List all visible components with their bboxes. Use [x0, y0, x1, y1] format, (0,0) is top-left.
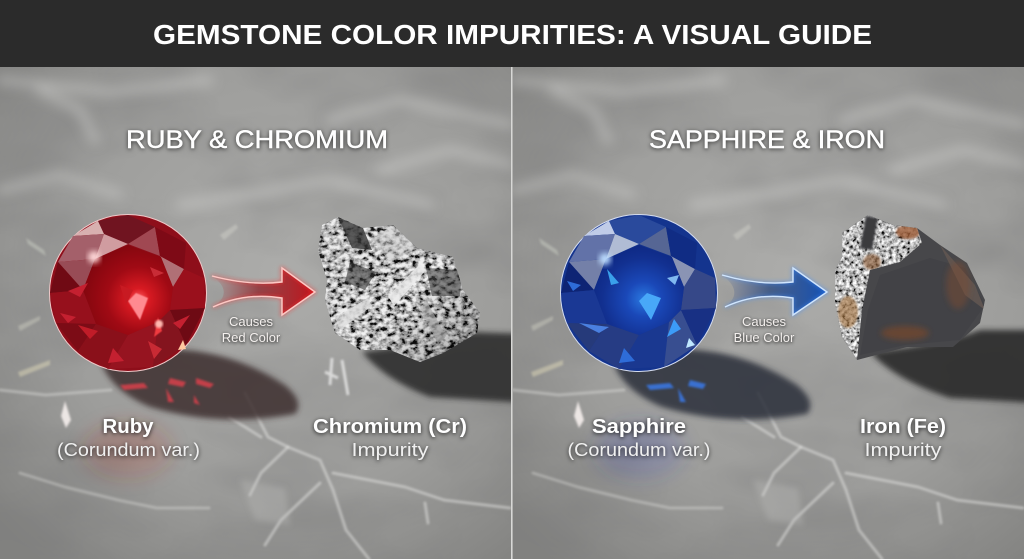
arrow label: causes red color [222, 314, 281, 345]
title: GEMSTONE COLOR IMPURITIES: A VISUAL GUIDE [153, 19, 872, 50]
arrow label: causes red color: Causes [229, 314, 274, 329]
arrow label: causes blue color [734, 314, 795, 345]
arrow: sapphire to iron [722, 268, 827, 315]
label: iron: Iron (Fe) [860, 416, 946, 438]
icon: ruby gem [50, 214, 206, 372]
label: iron: Impurity [864, 440, 942, 460]
panel: ruby and chromium [0, 67, 560, 559]
marble background right [513, 67, 1024, 559]
label: ruby: (Corundum var.) [57, 440, 200, 460]
label: iron [860, 416, 946, 460]
label: chromium: Impurity [352, 440, 428, 460]
label: chromium: Chromium (Cr) [313, 416, 467, 438]
rock shadow: iron [870, 330, 1024, 405]
arrow: ruby to chromium [212, 268, 315, 315]
heading: sapphire and iron: SAPPHIRE & IRON [649, 126, 885, 154]
label: sapphire: Sapphire [592, 416, 686, 438]
label: sapphire [568, 416, 710, 460]
arrow label: causes red color: Red Color [222, 330, 281, 345]
reflection below chromium [325, 358, 348, 395]
label: ruby: Ruby [102, 416, 154, 438]
marble background left [0, 67, 511, 559]
reflection below sapphire [596, 422, 684, 478]
icon: chromium rock [318, 217, 480, 362]
rock shadow: chromium [360, 328, 511, 406]
arrow label: causes blue color: Blue Color [734, 330, 795, 345]
icon: iron rock [835, 215, 985, 360]
panel divider [511, 67, 512, 559]
gem shadow: sapphire [612, 349, 810, 420]
gem shadow: ruby [100, 349, 298, 420]
icon: sapphire gem [560, 214, 718, 372]
reflection below ruby [84, 422, 172, 478]
panel: sapphire and iron [513, 67, 1024, 559]
heading: ruby and chromium: RUBY & CHROMIUM [126, 126, 388, 154]
label: sapphire: (Corundum var.) [568, 440, 710, 460]
label: ruby [57, 416, 200, 460]
arrow label: causes blue color: Causes [742, 314, 787, 329]
label: chromium [313, 416, 467, 460]
title bar [0, 0, 1024, 67]
